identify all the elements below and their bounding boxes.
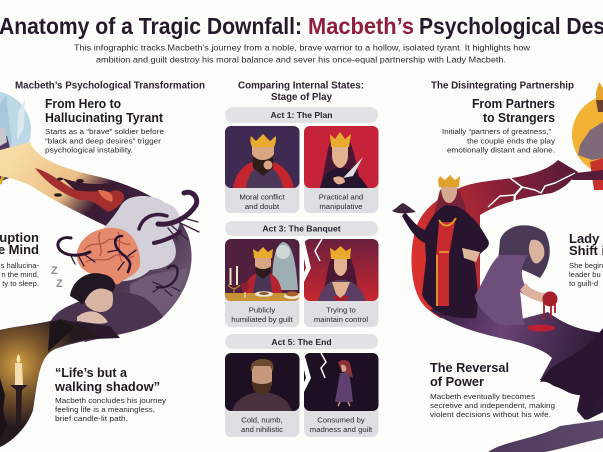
lower ribbon — [430, 290, 603, 420]
card: Macbeth Act 3: Publicly — [249, 306, 275, 314]
text block: Reversal of Power: Macbeth eventually becomes — [430, 392, 535, 401]
text block: Disruption: ty to sleep. — [2, 279, 39, 288]
card: Lady Macbeth Act 5 — [304, 353, 379, 437]
card: Lady Macbeth Act 1: Practical and — [319, 192, 363, 202]
text block: Disruption: s hallucina- — [1, 261, 39, 270]
text block: From Hero: “black and deep desires” trigger — [45, 136, 162, 146]
cloaked figure — [540, 328, 603, 420]
text block: From Partners: emotionally distant and alone. — [447, 146, 555, 154]
text block: From Hero: psychological instability. — [45, 146, 133, 154]
Act 1 label: Act 1: The Plan — [270, 110, 333, 120]
panel: Macbeth's ribbon illustration — [0, 91, 199, 447]
text block: Disruption: n the mind, — [1, 270, 39, 279]
card: Macbeth Act 1: Moral conflict — [239, 192, 285, 202]
text block: walking shadow: Macbeth concludes his journey — [55, 396, 166, 405]
scorpion: small left — [58, 238, 95, 266]
Act 1 label — [225, 107, 378, 123]
text block: walking shadow — [54, 365, 166, 423]
Z Z: Z — [51, 265, 58, 277]
text block: Lady Macbeth shift — [569, 231, 603, 288]
crack — [488, 173, 575, 212]
title highlight: Macbeth’s — [308, 13, 414, 39]
subtitle: This infographic tracks Macbeth’s journey from a noble, brave warrior to a hollow, isolated tyrant. It highlights how — [74, 42, 531, 52]
text block: From Hero: From Hero to — [45, 96, 121, 111]
title: Anatomy of a Tragic Downfall: — [0, 13, 302, 39]
text block: Reversal of Power: violent decisions without his wife. — [430, 410, 551, 419]
upper ribbon red — [411, 160, 578, 320]
text block: Lady Macbeth shift: leader bu — [569, 270, 601, 279]
Macbeth circle — [572, 82, 603, 190]
caption: Lady Macbeth Act 3 — [314, 306, 368, 324]
text block: Reversal of Power: of Power — [430, 374, 484, 389]
text block: From Hero — [45, 96, 164, 154]
text block: Disruption — [0, 230, 39, 288]
text block: From Partners — [442, 96, 555, 154]
text block: From Hero: Starts as a “brave” soldier before — [45, 127, 164, 136]
hero circle — [0, 91, 31, 184]
ribbon path — [0, 142, 192, 447]
card: Macbeth Act 1: and doubt — [245, 202, 280, 211]
Lady Macbeth — [392, 175, 489, 318]
caption: Lady Macbeth Act 5: madness and guilt — [310, 425, 373, 434]
Act 5 label — [225, 334, 378, 349]
bent Lady Macbeth — [475, 225, 558, 332]
card: Macbeth Act 5: and nihilistic — [241, 425, 283, 434]
heading: centre column: Comparing Internal States: — [238, 80, 364, 92]
text block: Reversal of Power — [430, 360, 555, 419]
subtitle — [74, 42, 531, 64]
caption: Lady Macbeth Act 5 — [310, 416, 373, 434]
card: Lady Macbeth Act 1 — [304, 126, 379, 213]
card: Macbeth Act 3 — [225, 239, 300, 327]
text block: From Hero: Hallucinating Tyrant — [45, 110, 164, 125]
flames — [35, 168, 124, 212]
scorpion: on brain — [108, 236, 136, 272]
brain — [77, 228, 140, 284]
candle scene — [0, 319, 100, 447]
caption: Lady Macbeth Act 3: Trying to — [326, 306, 356, 314]
text block: From Partners: to Strangers — [483, 110, 555, 125]
caption: Lady Macbeth Act 5: Consumed by — [317, 416, 365, 424]
heading: right column: The Disintegrating Partnership — [431, 80, 574, 92]
text block: Reversal of Power: The Reversal — [430, 360, 509, 375]
dream cloud — [95, 196, 180, 281]
crack between Act 3 cards — [300, 239, 311, 301]
text block: Lady Macbeth shift: to guilt-d — [569, 279, 598, 288]
text block: From Partners: From Partners — [472, 96, 555, 111]
Act 3 label — [225, 221, 378, 236]
text block: walking shadow: brief candle-lit path. — [55, 414, 128, 423]
heading: centre column — [238, 80, 364, 103]
Z lower: Z — [56, 278, 63, 290]
heading: left column: Macbeth’s Psychological Transformation — [15, 80, 205, 92]
card: Macbeth Act 3: humiliated by guilt — [231, 315, 294, 324]
panel: stage of play — [225, 107, 379, 437]
text block: From Partners: the couple ends the play — [467, 136, 555, 146]
text block: walking shadow: feeling life is a meaningless, — [55, 405, 155, 414]
text block: walking shadow: “Life’s but a — [55, 365, 128, 380]
card: Macbeth Act 5: Cold, numb, — [241, 416, 283, 424]
text block: Reversal of Power: secretive and independent, making — [430, 401, 555, 410]
scorpion: lower — [153, 266, 180, 296]
Act 5 label: Act 5: The End — [271, 337, 332, 347]
card: Macbeth Act 1 — [225, 126, 300, 213]
card: Macbeth Act 5 — [225, 353, 300, 437]
card: Lady Macbeth Act 3 — [304, 239, 379, 327]
sleeping man — [50, 273, 163, 342]
Act 3 label: Act 3: The Banquet — [262, 224, 341, 234]
subtitle: ambition and guilt destroy his moral balance and sever his once-equal partnership with Lady Macbeth. — [96, 54, 506, 64]
panel: partnership ribbon illustration — [392, 82, 603, 452]
text block: From Partners: Initially “partners of greatness,” — [442, 127, 551, 136]
heading: centre column: Stage of Play — [271, 92, 332, 103]
card: Lady Macbeth Act 1: manipulative — [319, 202, 363, 211]
crack between Act 5 cards — [300, 353, 311, 411]
shadow — [488, 420, 603, 452]
text block: walking shadow: walking shadow” — [54, 379, 160, 394]
caption: Lady Macbeth Act 3: maintain control — [314, 315, 368, 324]
scorpion: large — [139, 192, 199, 243]
